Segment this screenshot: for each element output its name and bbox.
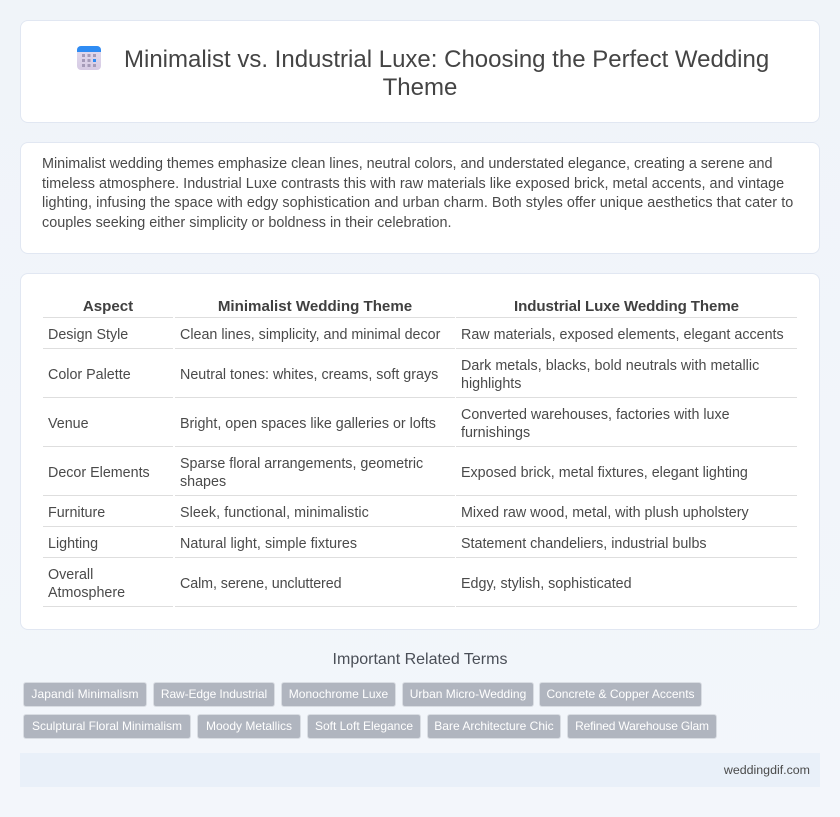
intro paragraph: lighting, infusing the space with edgy sophistication and urban charm. Both styles offer unique aesthetics that cater to (42, 195, 793, 211)
row: venue: Converted warehouses, factories with luxe (461, 407, 730, 423)
row: decor elements (48, 456, 748, 490)
title: Minimalist vs. Industrial Luxe: Choosing the Perfect Wedding (124, 46, 769, 73)
row: design style: Design Style (48, 327, 128, 343)
footer bar (20, 753, 820, 787)
row: design style (48, 327, 784, 343)
title (124, 46, 769, 101)
row: decor elements: Exposed brick, metal fixtures, elegant lighting (461, 465, 748, 481)
tags: related terms: Moody Metallics (206, 719, 292, 733)
row: furniture (48, 505, 749, 521)
tags: related terms: Monochrome Luxe (289, 687, 388, 701)
row: venue: furnishings (461, 425, 530, 441)
row: overall atmosphere (48, 567, 632, 601)
row: furniture: Sleek, functional, minimalistic (180, 505, 369, 521)
tags: related terms: Soft Loft Elegance (315, 719, 413, 733)
panel: comparison table (20, 273, 820, 630)
row: color palette: Dark metals, blacks, bold neutrals with metallic (461, 358, 759, 374)
heading: important related terms: Important Related Terms (333, 651, 507, 668)
title: Theme (383, 74, 457, 101)
tags: related terms: Refined Warehouse Glam (575, 719, 709, 733)
intro paragraph: timeless atmosphere. Industrial Luxe contrasts this with raw materials like exposed brick, metal accents, and vintage (42, 176, 784, 192)
row: design style: Clean lines, simplicity, and minimal decor (180, 327, 440, 343)
row: overall atmosphere: Edgy, stylish, sophisticated (461, 576, 632, 592)
intro paragraph: Minimalist wedding themes emphasize clean lines, neutral colors, and understated elegance, creating a serene and (42, 156, 772, 172)
footer text: weddingdif.com (724, 763, 810, 777)
row: color palette: Color Palette (48, 367, 131, 383)
panel: intro text (20, 142, 820, 254)
tags: related terms: Concrete & Copper Accents (546, 687, 695, 701)
intro paragraph: couples seeking either simplicity or boldness in their celebration. (42, 214, 452, 230)
tags: related terms (23, 682, 717, 739)
intro paragraph (42, 156, 793, 230)
row: color palette: highlights (461, 376, 521, 392)
tags: related terms: Urban Micro-Wedding (410, 687, 526, 701)
panel: title card (20, 20, 820, 123)
row: design style: Raw materials, exposed elements, elegant accents (461, 327, 784, 343)
row: decor elements: Sparse floral arrangements, geometric (180, 456, 423, 472)
row: venue: Bright, open spaces like galleries or lofts (180, 416, 436, 432)
table header: Aspect (83, 298, 133, 315)
row: color palette (48, 358, 759, 392)
row: lighting: Lighting (48, 536, 98, 552)
table header: Minimalist Wedding Theme (218, 298, 412, 315)
row: lighting: Natural light, simple fixtures (180, 536, 357, 552)
row: venue: Venue (48, 416, 89, 432)
row: overall atmosphere: Overall (48, 567, 93, 583)
row: decor elements: Decor Elements (48, 465, 150, 481)
icon: calendar (77, 46, 101, 70)
row: venue (48, 407, 730, 441)
row: lighting (48, 536, 707, 552)
tags: related terms: Bare Architecture Chic (434, 719, 554, 733)
tags: related terms: Raw-Edge Industrial (161, 687, 267, 701)
row: overall atmosphere: Calm, serene, uncluttered (180, 576, 341, 592)
row: color palette: Neutral tones: whites, creams, soft grays (180, 367, 438, 383)
table header: Industrial Luxe Wedding Theme (514, 298, 739, 315)
row: lighting: Statement chandeliers, industrial bulbs (461, 536, 707, 552)
row: decor elements: shapes (180, 474, 226, 490)
table header (83, 298, 739, 315)
tags: related terms: Japandi Minimalism (31, 687, 139, 701)
row: furniture: Mixed raw wood, metal, with plush upholstery (461, 505, 749, 521)
tags: related terms: Sculptural Floral Minimalism (32, 719, 182, 733)
row: overall atmosphere: Atmosphere (48, 585, 125, 601)
row: furniture: Furniture (48, 505, 105, 521)
